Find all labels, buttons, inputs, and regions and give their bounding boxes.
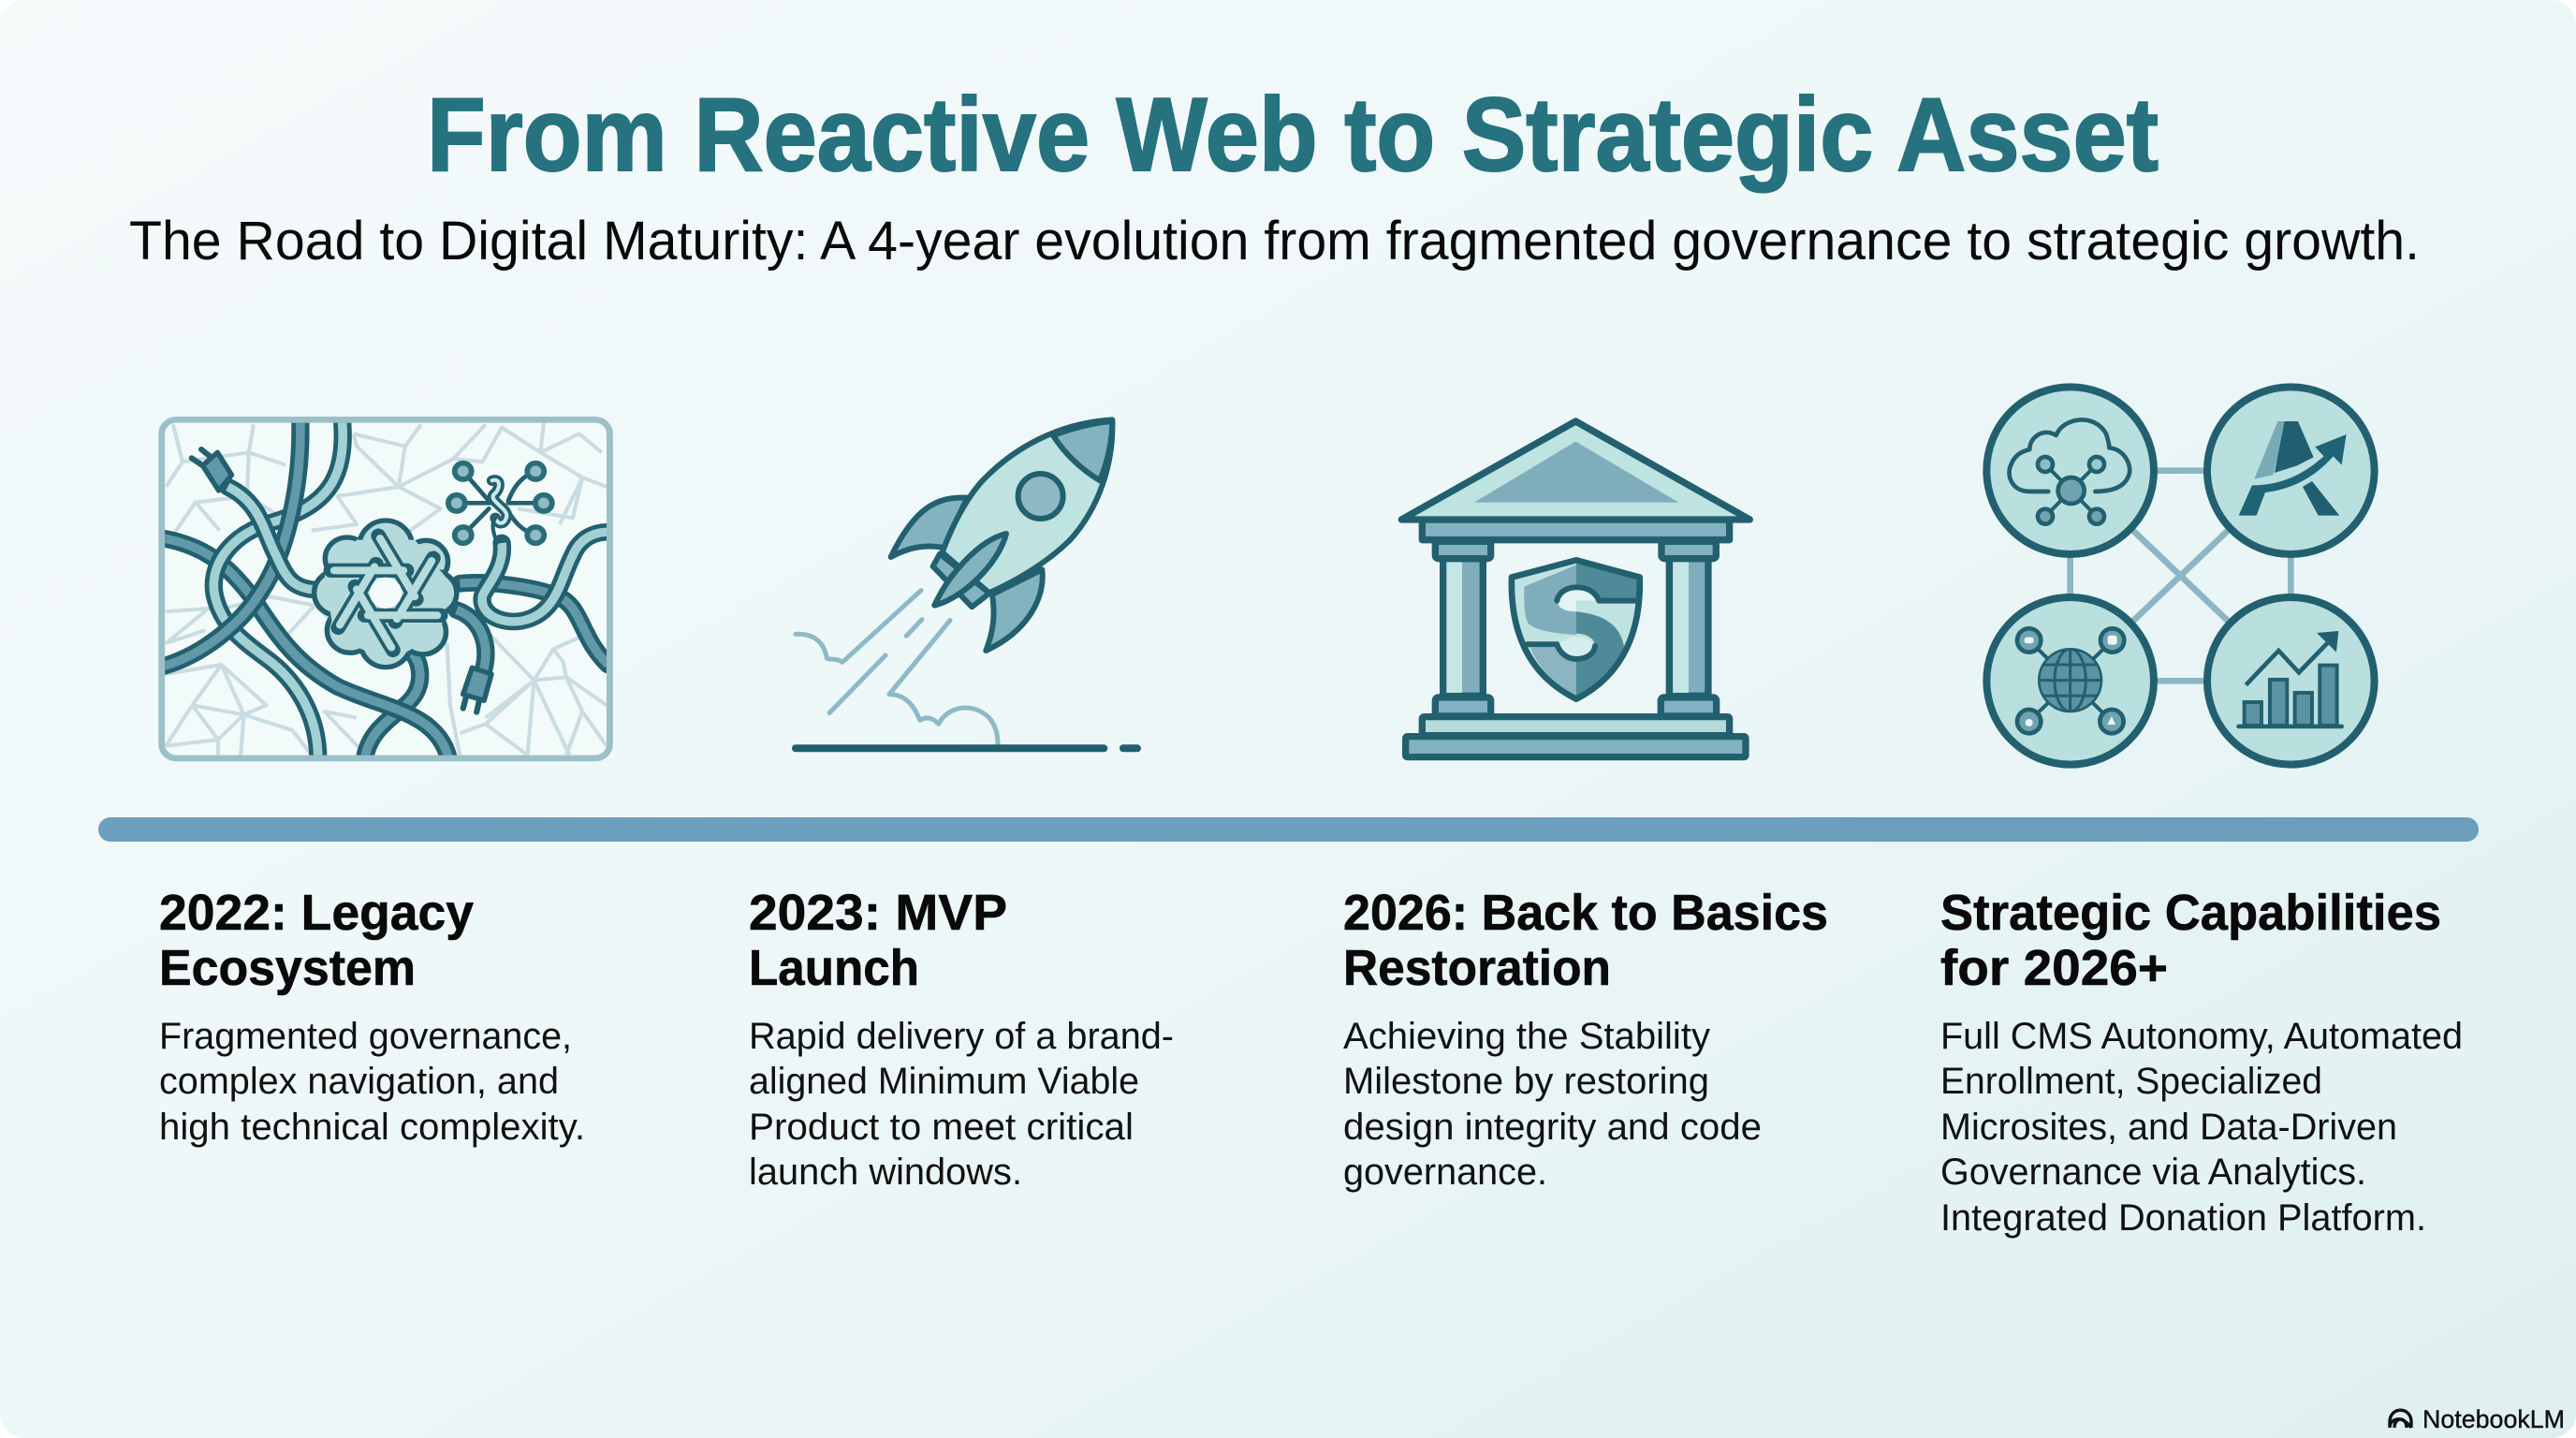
icon part: growth chart node: [2207, 597, 2375, 765]
icon part: cloud node: [1986, 387, 2154, 554]
icon: rocket launch: [796, 419, 1137, 748]
text block: 2022 legacy ecosystem: high technical complexity.: [159, 1107, 585, 1148]
text block: 2023 MVP launch: launch windows.: [749, 1152, 1022, 1193]
icon part: globe node: [1986, 597, 2154, 765]
icon part: ground line: [796, 737, 1137, 759]
cable: lower right wire: [460, 582, 608, 665]
text block: strategic capabilities: Full CMS Autonomy, Automated: [1940, 1016, 2463, 1057]
text block: 2023 MVP launch: aligned Minimum Viable: [749, 1061, 1139, 1102]
text block: strategic capabilities: Governance via Analytics.: [1940, 1152, 2366, 1193]
text block: strategic capabilities: Microsites, and Data-Driven: [1940, 1107, 2397, 1148]
icon: classical building with shield: [1401, 421, 1749, 757]
text block: 2026 back to basics: governance.: [1343, 1152, 1547, 1193]
text block: 2023 MVP launch: [749, 885, 1174, 1193]
icon part: fins and engine: [891, 498, 1043, 651]
text block: 2023 MVP launch: Product to meet critical: [749, 1107, 1134, 1148]
text block: strategic capabilities: for 2026+: [1940, 940, 2168, 996]
NotebookLM logo and wordmark: NotebookLM: [2422, 1405, 2565, 1433]
text block: 2022 legacy ecosystem: Fragmented governance,: [159, 1016, 572, 1057]
icon: strategic capabilities network: [1986, 387, 2375, 765]
icon: tangled legacy ecosystem: [162, 419, 609, 758]
icon part: exhaust and smoke: [796, 591, 998, 744]
text block: 2026 back to basics: 2026: Back to Basics: [1343, 885, 1828, 941]
text block: 2023 MVP launch: Rapid delivery of a brand-: [749, 1016, 1174, 1057]
text block: strategic capabilities: Integrated Donation Platform.: [1940, 1197, 2426, 1239]
icon part: connectors: [2071, 471, 2291, 681]
text block: 2026 back to basics: Restoration: [1343, 940, 1611, 996]
text block: strategic capabilities: Strategic Capabilities: [1940, 885, 2441, 941]
text block: 2022 legacy ecosystem: Ecosystem: [159, 940, 416, 996]
icon part: shield with S: [1512, 560, 1640, 699]
icon part: rocket body: [934, 419, 1112, 606]
subtitle: The Road to Digital Maturity: A 4-year evolution from fragmented governance to strategic growth.: [129, 211, 2420, 271]
text block: 2026 back to basics: design integrity and code: [1343, 1107, 1762, 1148]
timeline bar: [98, 817, 2479, 842]
text block: 2022 legacy ecosystem: complex navigation, and: [159, 1061, 559, 1102]
text block: 2022 legacy ecosystem: [159, 885, 585, 1148]
icon part: plug top left: [192, 449, 231, 491]
text block: 2026 back to basics: Milestone by restoring: [1343, 1061, 1709, 1102]
text block: 2023 MVP launch: Launch: [749, 940, 919, 996]
text block: 2022 legacy ecosystem: 2022: Legacy: [159, 885, 474, 941]
icon part: plug bottom right: [463, 668, 491, 712]
icon part: small network: [448, 463, 552, 543]
icon part: pillars: [1435, 541, 1717, 716]
icon part: letter A with arrow: [2207, 387, 2375, 554]
title: From Reactive Web to Strategic Asset: [427, 77, 2159, 193]
text block: 2026 back to basics: Achieving the Stability: [1343, 1016, 1710, 1057]
text block: strategic capabilities: [1940, 885, 2463, 1239]
text block: 2023 MVP launch: 2023: MVP: [749, 885, 1007, 941]
text block: strategic capabilities: Enrollment, Specialized: [1940, 1061, 2322, 1102]
icon part: central knot: [315, 521, 457, 668]
text block: 2026 back to basics: [1343, 885, 1828, 1193]
icon part: roof and steps: [1401, 421, 1749, 757]
